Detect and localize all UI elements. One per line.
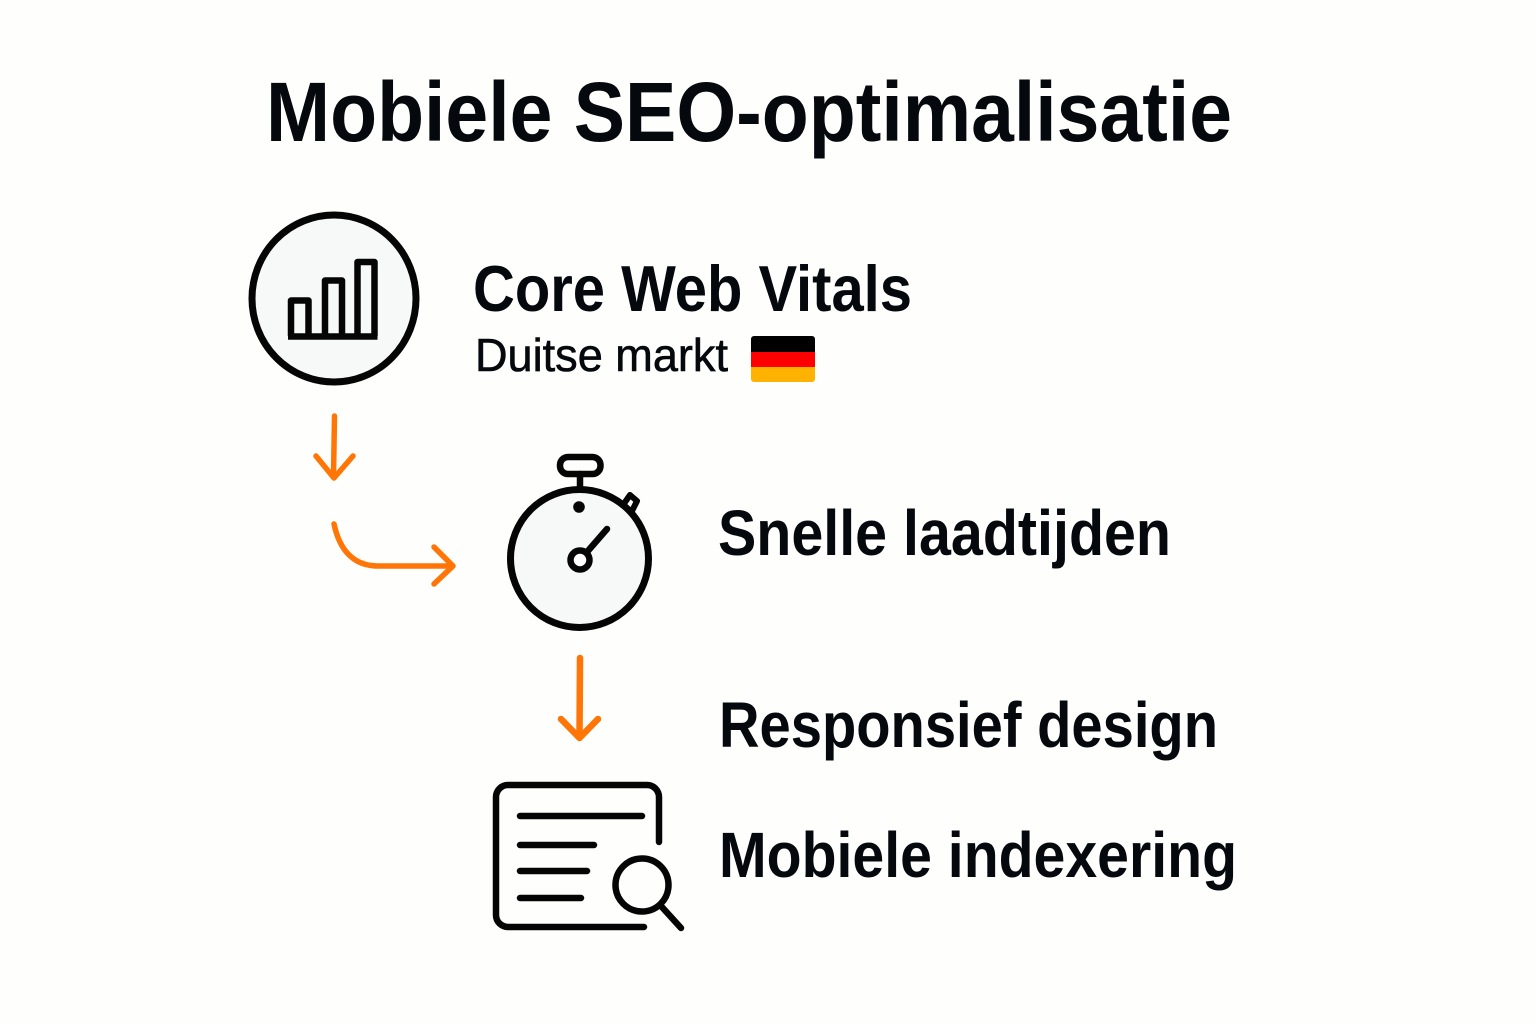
- arrow: curved to stopwatch: [334, 524, 453, 584]
- arrow: down from stopwatch: [561, 658, 598, 738]
- text: Duitse markt: Duitse markt: [475, 329, 728, 381]
- heading: Core Web Vitals: Core Web Vitals: [473, 252, 912, 325]
- heading: Mobiele indexering: Mobiele indexering: [719, 819, 1237, 891]
- heading: Responsief design: Responsief design: [719, 689, 1218, 761]
- icon: German flag: [751, 336, 815, 382]
- title: Mobiele SEO-optimalisatie: [266, 65, 1232, 159]
- icon: bar chart in circle: [252, 215, 416, 382]
- heading: Snelle laadtijden: Snelle laadtijden: [718, 497, 1171, 569]
- icon: stopwatch: [510, 457, 648, 628]
- arrow: down from chart: [316, 416, 353, 478]
- icon: document with magnifier: [496, 785, 681, 928]
